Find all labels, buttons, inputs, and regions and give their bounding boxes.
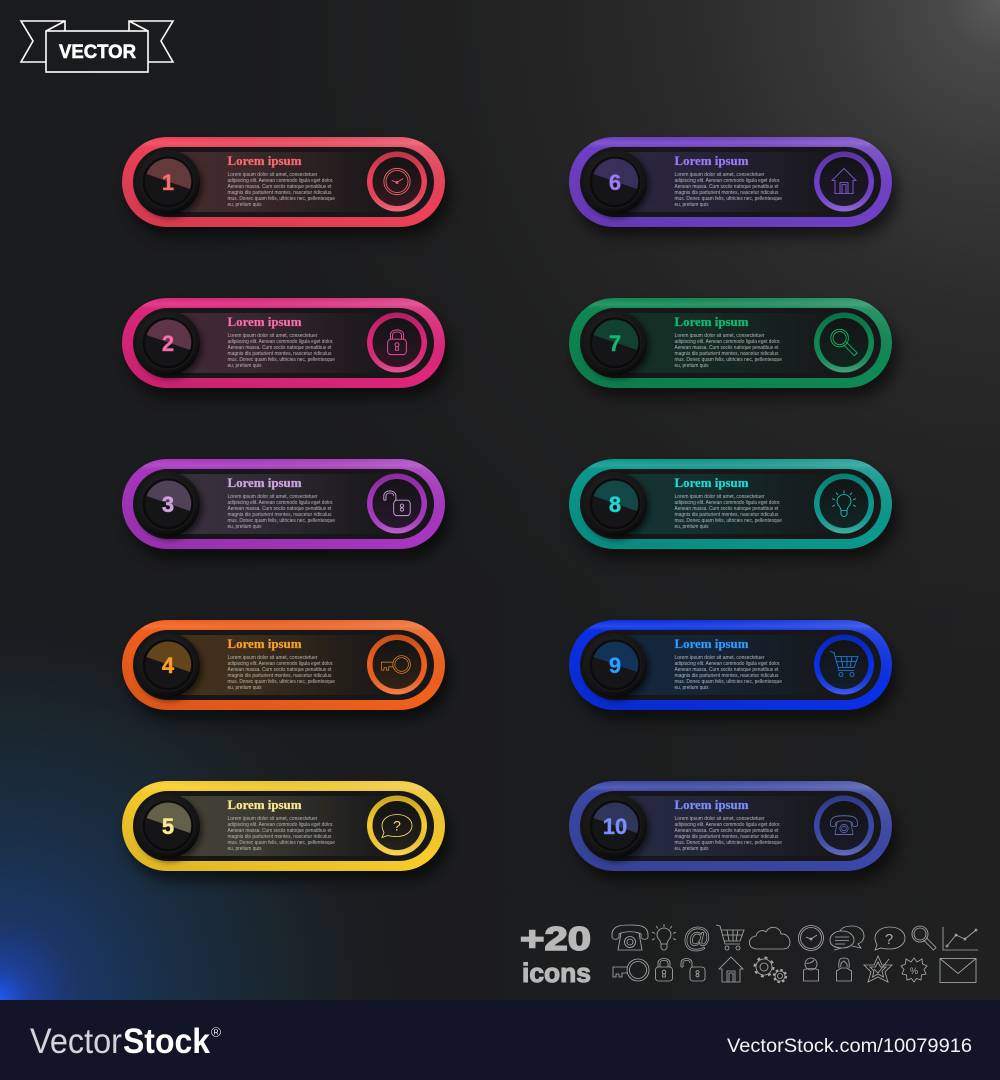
panel: item 5 yellow — [122, 781, 451, 881]
number disc 7 — [583, 311, 650, 379]
number disc 5 — [136, 794, 203, 862]
text block 7: Lorem ipsum dolor sit amet, consectetuer — [674, 333, 765, 339]
number disc 9 — [583, 633, 650, 701]
text block 1: mus. Donec quam felis, ultricies nec, pellentesque — [228, 196, 335, 202]
text block 3: eu, pretium quis — [228, 524, 262, 530]
text block 6: Lorem ipsum dolor sit amet, consectetuer — [674, 172, 765, 178]
text block 9: adipiscing elit. Aenean commodo ligula eget dolor. — [674, 661, 781, 667]
badge: vector ribbon: VECTOR — [59, 42, 136, 63]
text block 9 — [674, 655, 782, 691]
text block 8 — [674, 494, 782, 530]
number disc 9: 9 — [609, 653, 621, 678]
text block 6: magnis dis parturient montes, nascetur ridiculus — [674, 190, 779, 196]
text block 2: Aenean massa. Cum sociis natoque penatibus et — [228, 345, 332, 351]
number disc 3 — [136, 472, 203, 540]
icon set: +20 line icons: @ — [683, 922, 711, 953]
panel: item 9 blue — [569, 620, 898, 720]
text block 2 — [228, 333, 335, 369]
text block 8: Aenean massa. Cum sociis natoque penatibus et — [674, 506, 779, 512]
number disc 1 — [136, 150, 203, 218]
number disc 4 — [136, 633, 203, 701]
number disc 2 — [136, 311, 203, 379]
text block 4 — [228, 655, 335, 691]
text block 8: eu, pretium quis — [674, 524, 709, 530]
text block 1: Aenean massa. Cum sociis natoque penatibus et — [228, 184, 332, 190]
panel: item 10 indigo — [569, 781, 898, 881]
icon: lock — [367, 312, 427, 372]
text block 9: Lorem ipsum dolor sit amet, consectetuer — [674, 655, 765, 661]
text block 7: Aenean massa. Cum sociis natoque penatibus et — [674, 345, 779, 351]
text block 4: eu, pretium quis — [228, 685, 262, 691]
text block 2: Lorem ipsum dolor sit amet, consectetuer — [228, 333, 318, 339]
text block 9: mus. Donec quam felis, ultricies nec, pellentesque — [674, 679, 782, 685]
icon: cart — [814, 634, 874, 694]
text block 5: adipiscing elit. Aenean commodo ligula eget dolor. — [228, 822, 334, 828]
title 1: Lorem ipsum — [228, 154, 302, 168]
text block 5: magnis dis parturient montes, nascetur ridiculus — [228, 834, 332, 840]
text block 2: adipiscing elit. Aenean commodo ligula eget dolor. — [228, 339, 334, 345]
text block 9: magnis dis parturient montes, nascetur ridiculus — [674, 673, 779, 679]
title 5: Lorem ipsum — [228, 798, 302, 812]
number disc 10 — [583, 794, 650, 862]
logo: VectorStock: Stock — [123, 1022, 210, 1061]
text block 10 — [674, 816, 782, 852]
text block 2: eu, pretium quis — [228, 363, 262, 369]
number disc 10: 10 — [603, 814, 627, 839]
badge: vector ribbon — [21, 21, 173, 72]
number disc 7: 7 — [609, 331, 621, 356]
icon: question bubble: ? — [393, 818, 401, 834]
panel: item 6 violet — [569, 137, 898, 237]
text block 10: mus. Donec quam felis, ultricies nec, pellentesque — [674, 840, 782, 846]
icon: light bulb — [814, 474, 874, 534]
title 8: Lorem ipsum — [674, 476, 749, 490]
panel: item 7 green — [569, 298, 898, 398]
text block 6: adipiscing elit. Aenean commodo ligula eget dolor. — [674, 178, 781, 184]
panel: item 2 pink — [122, 298, 451, 398]
panel: item 3 purple — [122, 459, 451, 559]
logo: VectorStock: Vector — [30, 1022, 122, 1061]
panel: item 8 teal — [569, 459, 898, 559]
text block 5: Lorem ipsum dolor sit amet, consectetuer — [228, 816, 318, 822]
icon: open lock — [367, 474, 427, 534]
number disc 3: 3 — [162, 492, 174, 517]
text block 5: mus. Donec quam felis, ultricies nec, pellentesque — [228, 840, 335, 846]
text block 7: adipiscing elit. Aenean commodo ligula eget dolor. — [674, 339, 781, 345]
icon: question bubble — [367, 796, 427, 856]
text block 10: adipiscing elit. Aenean commodo ligula eget dolor. — [674, 822, 781, 828]
text block 10: eu, pretium quis — [674, 846, 709, 852]
text block 8: mus. Donec quam felis, ultricies nec, pellentesque — [674, 518, 782, 524]
title 2: Lorem ipsum — [228, 315, 302, 329]
text block 7: eu, pretium quis — [674, 363, 709, 369]
text block 4: magnis dis parturient montes, nascetur ridiculus — [228, 673, 332, 679]
text block 5: eu, pretium quis — [228, 846, 262, 852]
number disc 2: 2 — [162, 331, 174, 356]
icon set: +20 line icons — [612, 922, 978, 982]
title 6: Lorem ipsum — [674, 154, 749, 168]
text block 1 — [228, 172, 335, 208]
title 9: Lorem ipsum — [674, 637, 749, 651]
logo: VectorStock — [30, 1022, 220, 1061]
text block 7 — [674, 333, 782, 369]
heading: +20 icons: icons — [522, 958, 591, 988]
text block 10: Lorem ipsum dolor sit amet, consectetuer — [674, 816, 765, 822]
text block 6: eu, pretium quis — [674, 202, 709, 208]
icon: key — [367, 634, 427, 694]
number disc 1: 1 — [162, 170, 174, 195]
icon set: +20 line icons: % — [910, 966, 918, 976]
text block 7: magnis dis parturient montes, nascetur ridiculus — [674, 351, 779, 357]
icon set: +20 line icons: ? — [885, 931, 893, 948]
logo: VectorStock: R — [213, 1030, 219, 1036]
text block 1: eu, pretium quis — [228, 202, 262, 208]
text block 4: mus. Donec quam felis, ultricies nec, pellentesque — [228, 679, 335, 685]
footer band — [0, 1000, 1000, 1080]
title 10: Lorem ipsum — [674, 798, 749, 812]
title 7: Lorem ipsum — [674, 315, 749, 329]
title 3: Lorem ipsum — [228, 476, 302, 490]
text block 3: Lorem ipsum dolor sit amet, consectetuer — [228, 494, 318, 500]
text block 1: adipiscing elit. Aenean commodo ligula eget dolor. — [228, 178, 334, 184]
text block 9: Aenean massa. Cum sociis natoque penatibus et — [674, 667, 779, 673]
footer url: VectorStock.com/10079916 — [727, 1036, 972, 1057]
text block 10: magnis dis parturient montes, nascetur ridiculus — [674, 834, 779, 840]
text block 2: mus. Donec quam felis, ultricies nec, pellentesque — [228, 357, 335, 363]
text block 10: Aenean massa. Cum sociis natoque penatibus et — [674, 828, 779, 834]
text block 4: adipiscing elit. Aenean commodo ligula eget dolor. — [228, 661, 334, 667]
icon: magnifier — [814, 312, 874, 372]
text block 9: eu, pretium quis — [674, 685, 709, 691]
number disc 5: 5 — [162, 814, 174, 839]
text block 6: mus. Donec quam felis, ultricies nec, pellentesque — [674, 196, 782, 202]
text block 3: magnis dis parturient montes, nascetur ridiculus — [228, 512, 332, 518]
text block 4: Aenean massa. Cum sociis natoque penatibus et — [228, 667, 332, 673]
panel: item 1 red — [122, 137, 451, 237]
text block 6 — [674, 172, 782, 208]
icon: clock — [367, 152, 427, 212]
icon: house — [814, 152, 874, 212]
panel: item 4 orange — [122, 620, 451, 720]
title 4: Lorem ipsum — [228, 637, 302, 651]
number disc 8 — [583, 472, 650, 540]
heading: +20 icons — [520, 920, 591, 988]
text block 3: mus. Donec quam felis, ultricies nec, pellentesque — [228, 518, 335, 524]
number disc 6: 6 — [609, 170, 621, 195]
icon: telephone — [814, 796, 874, 856]
text block 3: adipiscing elit. Aenean commodo ligula eget dolor. — [228, 500, 334, 506]
text block 5 — [228, 816, 335, 852]
text block 5: Aenean massa. Cum sociis natoque penatibus et — [228, 828, 332, 834]
text block 6: Aenean massa. Cum sociis natoque penatibus et — [674, 184, 779, 190]
text block 1: magnis dis parturient montes, nascetur ridiculus — [228, 190, 332, 196]
text block 3 — [228, 494, 335, 530]
text block 2: magnis dis parturient montes, nascetur ridiculus — [228, 351, 332, 357]
text block 8: adipiscing elit. Aenean commodo ligula eget dolor. — [674, 500, 781, 506]
heading: +20 icons: +20 — [520, 920, 591, 957]
text block 8: Lorem ipsum dolor sit amet, consectetuer — [674, 494, 765, 500]
text block 8: magnis dis parturient montes, nascetur ridiculus — [674, 512, 779, 518]
text block 4: Lorem ipsum dolor sit amet, consectetuer — [228, 655, 318, 661]
text block 1: Lorem ipsum dolor sit amet, consectetuer — [228, 172, 318, 178]
number disc 6 — [583, 150, 650, 218]
number disc 8: 8 — [609, 492, 621, 517]
number disc 4: 4 — [162, 653, 175, 678]
text block 7: mus. Donec quam felis, ultricies nec, pellentesque — [674, 357, 782, 363]
text block 3: Aenean massa. Cum sociis natoque penatibus et — [228, 506, 332, 512]
